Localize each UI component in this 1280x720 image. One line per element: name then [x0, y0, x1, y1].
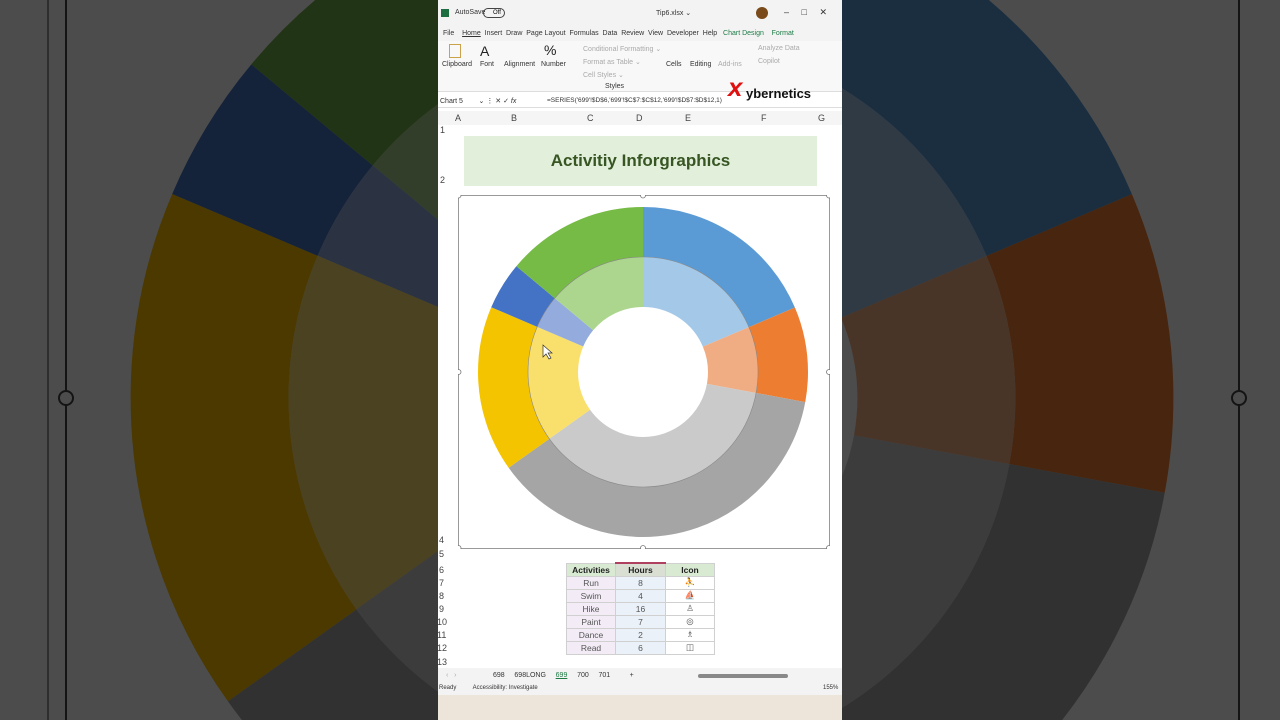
data table: 2 — [638, 630, 643, 640]
row numbers: 4 — [439, 535, 444, 545]
row numbers: 9 — [439, 604, 444, 614]
ribbon: Cell Styles ⌄ — [583, 72, 624, 79]
column headers: B — [511, 113, 517, 123]
data table: Activities — [572, 564, 610, 574]
inner ring — [528, 257, 758, 487]
data table: ⛵ — [685, 590, 695, 600]
data table: 16 — [636, 604, 645, 614]
ribbon: Alignment — [504, 61, 535, 68]
ribbon — [438, 41, 842, 92]
data table: Run — [583, 578, 599, 588]
column headers: F — [761, 113, 766, 123]
column headers: A — [455, 113, 461, 123]
row numbers: 1 — [440, 125, 445, 135]
status bar — [438, 683, 842, 695]
ribbon: Cells — [666, 61, 682, 68]
sheet tabs: 698 698LONG 699 700 701 + — [493, 672, 634, 679]
row numbers: 7 — [439, 578, 444, 588]
data table: Swim — [581, 590, 601, 600]
sheet tabs — [438, 668, 842, 683]
excel window — [438, 0, 842, 720]
title bar: – □ ✕ — [784, 7, 827, 17]
ribbon: Font — [480, 61, 494, 68]
menu tabs — [438, 25, 842, 41]
row numbers: 5 — [439, 549, 444, 559]
data table: ⛹ — [685, 577, 695, 587]
ribbon: Copilot — [758, 58, 780, 65]
formula bar: Chart 5 ⌄ ⋮ ✕ ✓ fx — [440, 98, 516, 105]
outer ring — [503, 232, 783, 512]
formula bar — [438, 94, 842, 108]
data table: Read — [581, 642, 601, 652]
title bar: Tip6.xlsx ⌄ — [656, 10, 691, 17]
status bar: Ready Accessibility: Investigate — [439, 685, 538, 691]
ribbon: Editing — [690, 61, 711, 68]
menu tabs: File Home Insert Draw Page Layout Formulas Data Review View Developer Help Chart Design Format — [443, 30, 794, 37]
title bar: AutoSave — [455, 9, 485, 16]
data table: Hours — [628, 565, 653, 575]
data table: 6 — [638, 642, 643, 652]
ribbon: Clipboard — [442, 61, 472, 68]
logo: xybernetics: ybernetics — [746, 86, 811, 101]
data table: ♙ — [686, 603, 694, 613]
ribbon: Styles — [605, 83, 624, 90]
title bar — [438, 0, 842, 25]
ribbon: Number — [541, 61, 566, 68]
chart: double donut — [458, 195, 830, 549]
logo: xybernetics — [727, 72, 811, 102]
ribbon: Conditional Formatting ⌄ — [583, 46, 661, 53]
data table: ◫ — [686, 642, 694, 652]
column headers: G — [818, 113, 825, 123]
ribbon: Analyze Data — [758, 45, 800, 52]
ribbon: % — [544, 42, 556, 58]
row numbers: 6 — [439, 565, 444, 575]
data table: Icon — [681, 564, 699, 574]
row numbers: 2 — [440, 175, 445, 185]
data table: ◎ — [686, 616, 694, 626]
ribbon: Format as Table ⌄ — [583, 59, 641, 66]
title bar: Off — [493, 10, 501, 16]
row numbers — [438, 125, 447, 667]
data table — [566, 562, 715, 655]
ribbon: Add-ins — [718, 61, 742, 68]
title — [464, 136, 817, 186]
logo: xybernetics: x — [728, 72, 742, 102]
data table: ♗ — [686, 629, 694, 639]
column headers: D — [636, 113, 642, 123]
title: Activitiy Inforgraphics — [551, 151, 730, 170]
data table: 8 — [638, 578, 643, 588]
formula bar: =SERIES('699'!$D$6,'699'!$C$7:$C$12,'699'!$D$7:$D$12,1) — [547, 97, 722, 104]
column headers: C — [587, 113, 594, 123]
data table: Dance — [579, 630, 603, 640]
data table: Paint — [581, 616, 601, 626]
status bar: 155% — [823, 685, 838, 691]
column headers: E — [685, 113, 691, 123]
data table: 7 — [638, 616, 643, 626]
column headers — [438, 111, 842, 125]
ribbon: A — [480, 43, 489, 59]
data table: 4 — [638, 590, 643, 600]
cursor — [543, 345, 552, 359]
sheet tabs: ‹ › — [446, 672, 456, 679]
row numbers: 8 — [439, 591, 444, 601]
data table: Hike — [582, 604, 600, 614]
